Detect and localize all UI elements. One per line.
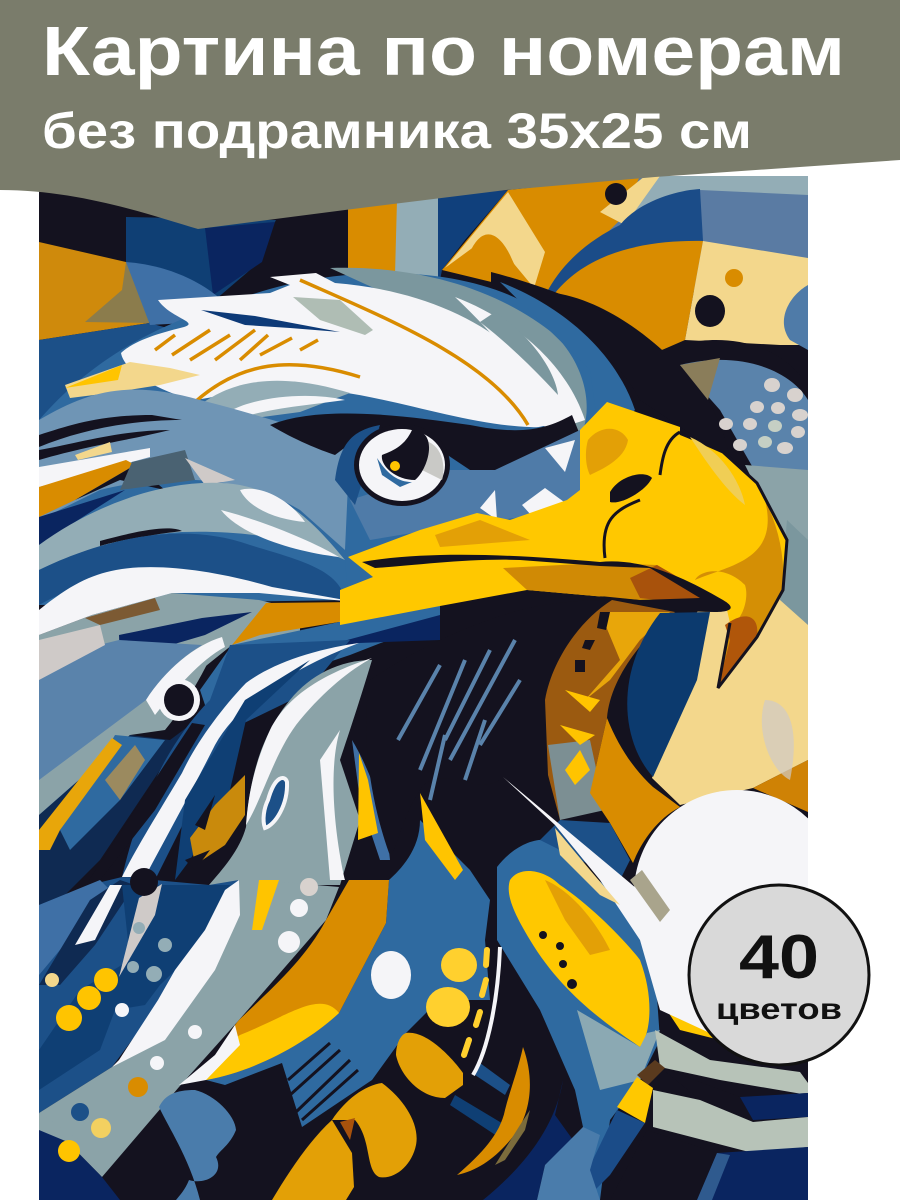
colour count badge — [689, 885, 869, 1065]
brow shadow — [270, 413, 582, 474]
gold lobes and dots — [45, 868, 530, 1200]
eagle painting — [39, 176, 840, 1200]
central blue feathers — [206, 777, 808, 1200]
gold collar — [545, 600, 675, 820]
colour count badge: цветов — [716, 993, 842, 1026]
beak — [340, 402, 787, 688]
top background shapes — [39, 176, 808, 470]
head plumage — [39, 268, 640, 620]
background dots — [605, 183, 808, 540]
colour count badge: 40 — [739, 923, 819, 992]
right background — [590, 520, 808, 1038]
lower plumage and neck — [39, 567, 522, 905]
lower left feathers — [39, 877, 389, 1200]
face feathers — [350, 430, 585, 540]
eye — [335, 424, 450, 506]
face feather highlights — [480, 440, 575, 525]
subtitle: без подрамника 35х25 см — [42, 103, 752, 159]
header banner — [0, 0, 900, 229]
title: Картина по номерам — [42, 12, 845, 90]
